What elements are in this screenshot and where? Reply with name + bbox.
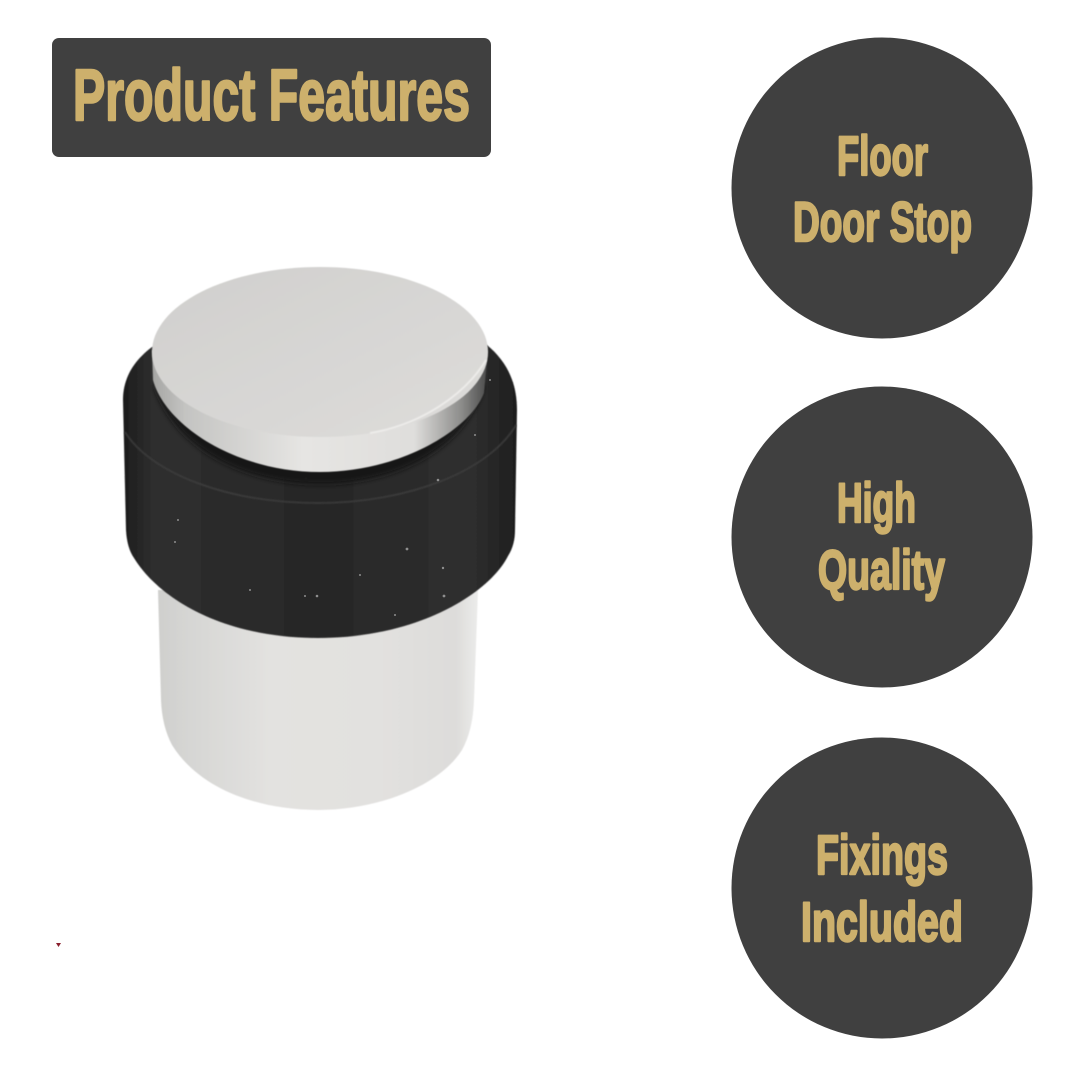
heading: Product Features: Product Features xyxy=(73,56,470,136)
feature badge: High Quality: Quality xyxy=(818,538,945,601)
black rubber ring xyxy=(123,345,517,638)
feature badge: Floor Door Stop: Door Stop xyxy=(793,190,972,253)
metal base cylinder xyxy=(158,590,478,810)
feature badge: Floor Door Stop xyxy=(732,38,1032,338)
cap rim highlight xyxy=(370,360,486,433)
heading: Product Features xyxy=(52,38,491,157)
cap shadow on rubber xyxy=(154,385,484,484)
feature badge: High Quality xyxy=(732,386,1032,688)
rubber speckles xyxy=(174,379,491,616)
feature badge: Fixings Included xyxy=(732,738,1032,1038)
cap side wall xyxy=(152,350,488,472)
product image: floor door stop xyxy=(123,267,517,810)
small red mark xyxy=(56,943,61,947)
feature badge: High Quality: High xyxy=(837,471,916,534)
feature badge: Floor Door Stop: Floor xyxy=(837,124,928,187)
rubber top edge highlight xyxy=(125,425,516,503)
feature badge: Fixings Included: Included xyxy=(801,890,963,953)
feature badge: Fixings Included: Fixings xyxy=(816,823,948,886)
polished cap top xyxy=(152,267,488,437)
